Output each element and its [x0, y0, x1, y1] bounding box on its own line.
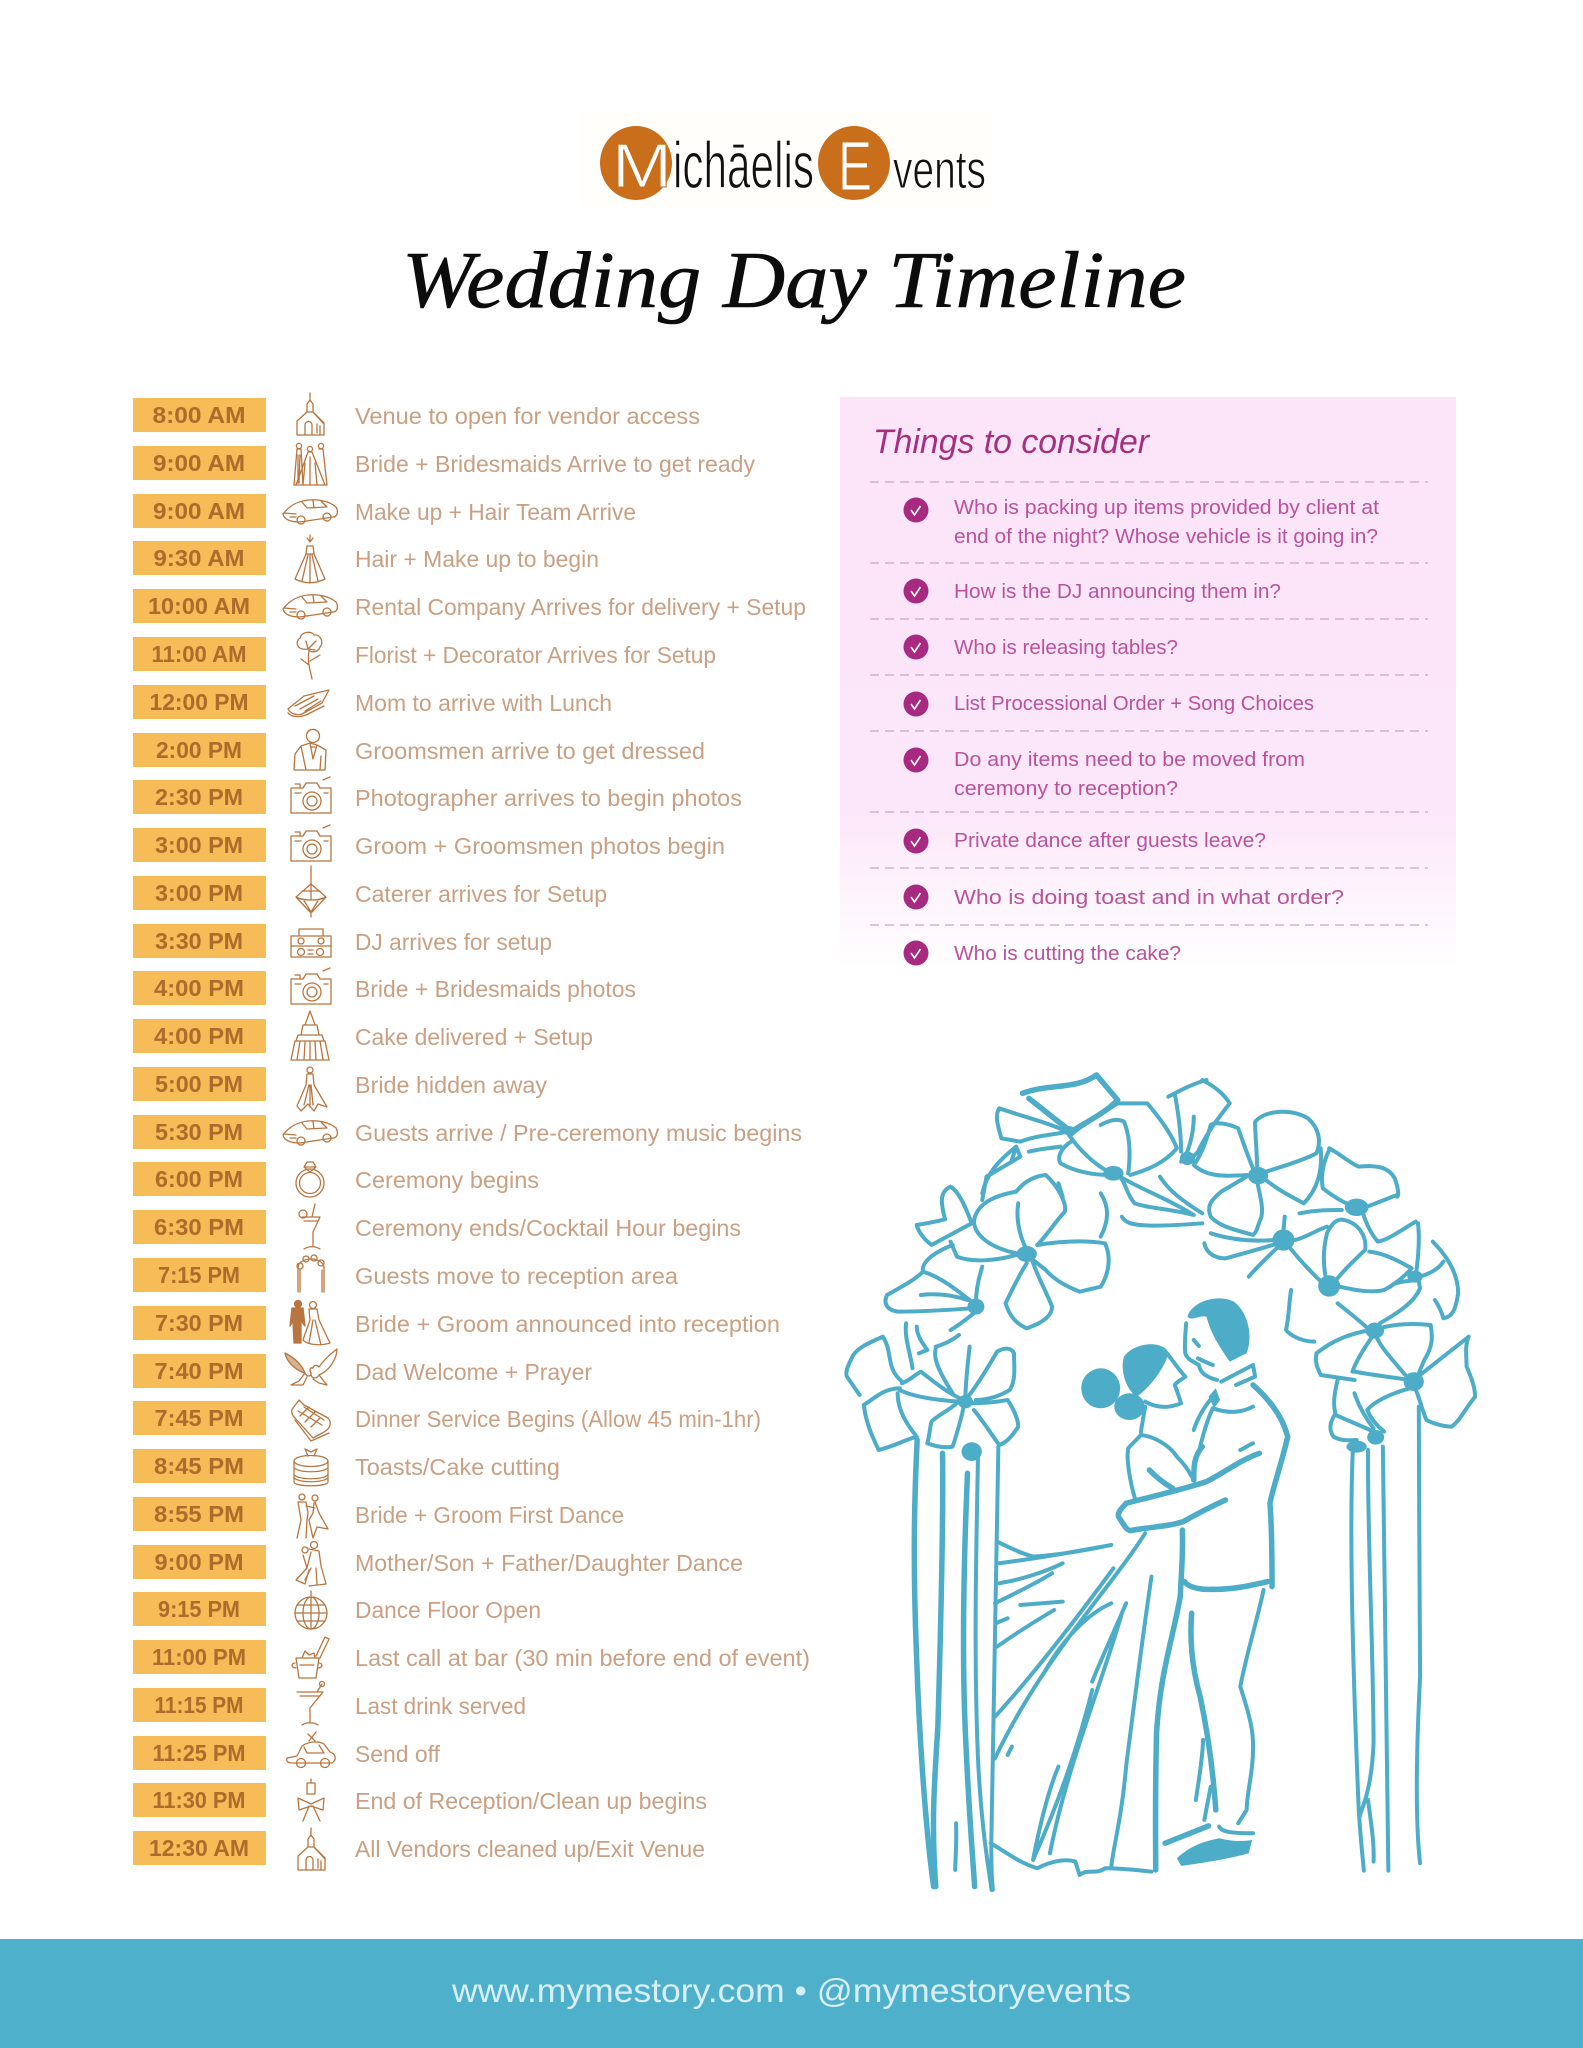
row: 3:00 PM caterer: Caterer arrives for Setup	[355, 881, 607, 907]
row: 3:00 PM groom photos: 3:00 PM	[155, 832, 243, 858]
row: 8:55 PM: Bride + Groom First Dance	[355, 1502, 624, 1528]
row: 11:00 AM: Florist + Decorator Arrives for Setup	[355, 642, 716, 668]
row: 8:00 AM	[133, 393, 700, 435]
row: 7:15 PM: 7:15 PM	[158, 1262, 240, 1288]
row: 2:00 PM: Groomsmen arrive to get dressed	[355, 738, 705, 764]
row: 12:30 AM	[133, 1828, 705, 1870]
row: 8:45 PM: 8:45 PM	[154, 1453, 244, 1479]
item: toast: Who is doing toast and in what order?	[954, 886, 1344, 909]
row: 6:00 PM: Ceremony begins	[355, 1167, 539, 1193]
row: 5:30 PM: 5:30 PM	[155, 1119, 243, 1145]
row: 2:00 PM	[133, 729, 705, 770]
row: 2:30 PM: Photographer arrives to begin photos	[355, 785, 742, 811]
row: 3:00 PM caterer	[133, 866, 607, 917]
row: 9:30 AM	[133, 535, 599, 583]
flowers of arch	[846, 1075, 1475, 1461]
row: 7:45 PM: Dinner Service Begins (Allow 45 min-1hr)	[355, 1406, 761, 1432]
row: 11:00 AM: 11:00 AM	[152, 641, 246, 667]
row: 4:00 PM cake: Cake delivered + Setup	[355, 1024, 593, 1050]
row: 6:30 PM	[133, 1204, 741, 1249]
row: 9:00 PM: 9:00 PM	[154, 1549, 244, 1575]
row: 7:30 PM	[133, 1300, 780, 1345]
row: 3:30 PM: DJ arrives for setup	[355, 929, 552, 955]
row: 8:45 PM: Toasts/Cake cutting	[355, 1454, 560, 1480]
row: 9:00 AM make up: Make up + Hair Team Arrive	[355, 499, 636, 525]
bride head and bodice	[1081, 1344, 1192, 1500]
row: 3:00 PM groom photos: Groom + Groomsmen photos begin	[355, 833, 725, 859]
row: 4:00 PM cake: 4:00 PM	[154, 1023, 244, 1049]
row: 3:00 PM groom photos	[133, 825, 725, 862]
row: 8:00 AM: 8:00 AM	[152, 402, 246, 428]
item: items moved: ceremony to reception?	[954, 777, 1178, 800]
row: 2:00 PM: 2:00 PM	[156, 737, 242, 763]
item: packing up: Who is packing up items provided by client at	[954, 496, 1379, 519]
row: 9:00 AM make up: 9:00 AM	[153, 498, 245, 524]
item: DJ: How is the DJ announcing them in?	[954, 580, 1281, 603]
row: 12:00 PM: 12:00 PM	[150, 689, 248, 715]
row: 7:40 PM: 7:40 PM	[154, 1358, 244, 1384]
row: 8:55 PM: 8:55 PM	[154, 1501, 244, 1527]
item: processional: List Processional Order + Song Choices	[954, 692, 1314, 715]
row: 11:30 PM: End of Reception/Clean up begins	[355, 1788, 707, 1814]
logo: Michaelis Events: ichāelis	[673, 128, 814, 202]
item: private dance: Private dance after guests leave?	[954, 829, 1266, 852]
row: 12:00 PM	[133, 685, 612, 719]
row: 6:30 PM: Ceremony ends/Cocktail Hour begins	[355, 1215, 741, 1241]
row: 7:30 PM: 7:30 PM	[155, 1310, 243, 1336]
item: packing up: end of the night? Whose vehicle is it going in?	[954, 525, 1378, 548]
row: 7:30 PM: Bride + Groom announced into reception	[355, 1311, 780, 1337]
row: 4:00 PM photos: Bride + Bridesmaids photos	[355, 976, 636, 1002]
row: 7:15 PM: Guests move to reception area	[355, 1263, 679, 1289]
row: 11:30 PM	[133, 1779, 707, 1821]
row: 7:40 PM	[133, 1349, 592, 1388]
row: 5:30 PM	[133, 1115, 802, 1149]
row: 9:15 PM: Dance Floor Open	[355, 1597, 541, 1623]
item: items moved	[904, 748, 1305, 800]
row: 3:30 PM	[133, 924, 552, 958]
row: 7:45 PM	[133, 1400, 761, 1441]
row: 2:30 PM	[133, 777, 742, 814]
row: 11:00 AM	[133, 632, 716, 679]
row: 9:00 PM: Mother/Son + Father/Daughter Dance	[355, 1550, 743, 1576]
row: 7:15 PM	[133, 1255, 679, 1292]
row: 9:00 AM bride: Bride + Bridesmaids Arrive to get ready	[355, 451, 755, 477]
timeline list	[133, 393, 810, 1870]
item: items moved: Do any items need to be moved from	[954, 748, 1305, 771]
row: 5:00 PM	[133, 1067, 547, 1111]
row: 8:00 AM: Venue to open for vendor access	[355, 403, 700, 429]
row: 11:15 PM: Last drink served	[355, 1693, 526, 1719]
row: 6:00 PM	[133, 1162, 539, 1197]
logo: Michaelis Events: M	[612, 132, 672, 201]
row: 9:30 AM: Hair + Make up to begin	[355, 546, 599, 572]
row: 2:30 PM: 2:30 PM	[155, 784, 243, 810]
row: 8:45 PM	[133, 1449, 560, 1486]
arch stems	[914, 1407, 1420, 1890]
row: 6:00 PM: 6:00 PM	[155, 1166, 243, 1192]
row: 9:00 AM bride: 9:00 AM	[153, 450, 245, 476]
row: 4:00 PM photos: 4:00 PM	[154, 975, 244, 1001]
row: 11:00 PM: Last call at bar (30 min before end of event)	[355, 1645, 810, 1671]
item: tables: Who is releasing tables?	[954, 636, 1178, 659]
row: 7:40 PM: Dad Welcome + Prayer	[355, 1359, 592, 1385]
item: cake: Who is cutting the cake?	[954, 942, 1181, 965]
row: 10:00 AM	[133, 589, 806, 623]
row: 9:15 PM	[133, 1591, 541, 1629]
row: 11:15 PM	[133, 1682, 526, 1725]
item: packing up	[904, 496, 1379, 548]
row: 5:00 PM: 5:00 PM	[155, 1071, 243, 1097]
row: 9:30 AM: 9:30 AM	[154, 545, 244, 571]
row: 9:00 AM make up	[133, 494, 636, 528]
panel heading: Things to consider	[873, 423, 1151, 461]
row: 12:30 AM: All Vendors cleaned up/Exit Venue	[355, 1836, 705, 1862]
logo: Michaelis Events: E	[838, 127, 872, 205]
row: 11:25 PM: Send off	[355, 1741, 440, 1767]
footer band	[0, 1939, 1583, 2048]
row: 11:00 PM	[133, 1637, 810, 1678]
row: 12:00 PM: Mom to arrive with Lunch	[355, 690, 612, 716]
row: 3:00 PM caterer: 3:00 PM	[155, 880, 243, 906]
title: Wedding Day Timeline	[402, 237, 1186, 325]
row: 12:30 AM: 12:30 AM	[149, 1835, 249, 1861]
groom	[1118, 1298, 1288, 1587]
gown and groom legs	[991, 1530, 1268, 1875]
row: 5:00 PM: Bride hidden away	[355, 1072, 547, 1098]
row: 9:00 PM	[133, 1542, 743, 1586]
row: 11:00 PM: 11:00 PM	[152, 1644, 246, 1670]
row: 10:00 AM: Rental Company Arrives for delivery + Setup	[355, 594, 806, 620]
row: 4:00 PM photos	[133, 968, 636, 1005]
footer text: www.mymestory.com • @mymestoryevents	[451, 1972, 1131, 2009]
row: 5:30 PM: Guests arrive / Pre-ceremony music begins	[355, 1120, 802, 1146]
illustration: couple under floral arch	[846, 1075, 1475, 1890]
row: 11:30 PM: 11:30 PM	[152, 1787, 246, 1813]
row: 8:55 PM	[133, 1494, 624, 1538]
row: 6:30 PM: 6:30 PM	[154, 1214, 244, 1240]
row: 7:45 PM: 7:45 PM	[154, 1405, 244, 1431]
row: 11:25 PM	[133, 1732, 440, 1770]
row: 4:00 PM cake	[133, 1011, 593, 1060]
row: 9:00 AM bride	[133, 443, 755, 485]
panel: things to consider	[840, 397, 1456, 968]
row: 3:30 PM: 3:30 PM	[155, 928, 243, 954]
row: 9:15 PM: 9:15 PM	[158, 1596, 240, 1622]
row: 11:15 PM: 11:15 PM	[154, 1692, 244, 1718]
logo: Michaelis Events: vents	[893, 140, 986, 200]
row: 11:25 PM: 11:25 PM	[152, 1740, 246, 1766]
logo: Michaelis Events	[578, 112, 991, 207]
row: 10:00 AM: 10:00 AM	[148, 593, 250, 619]
